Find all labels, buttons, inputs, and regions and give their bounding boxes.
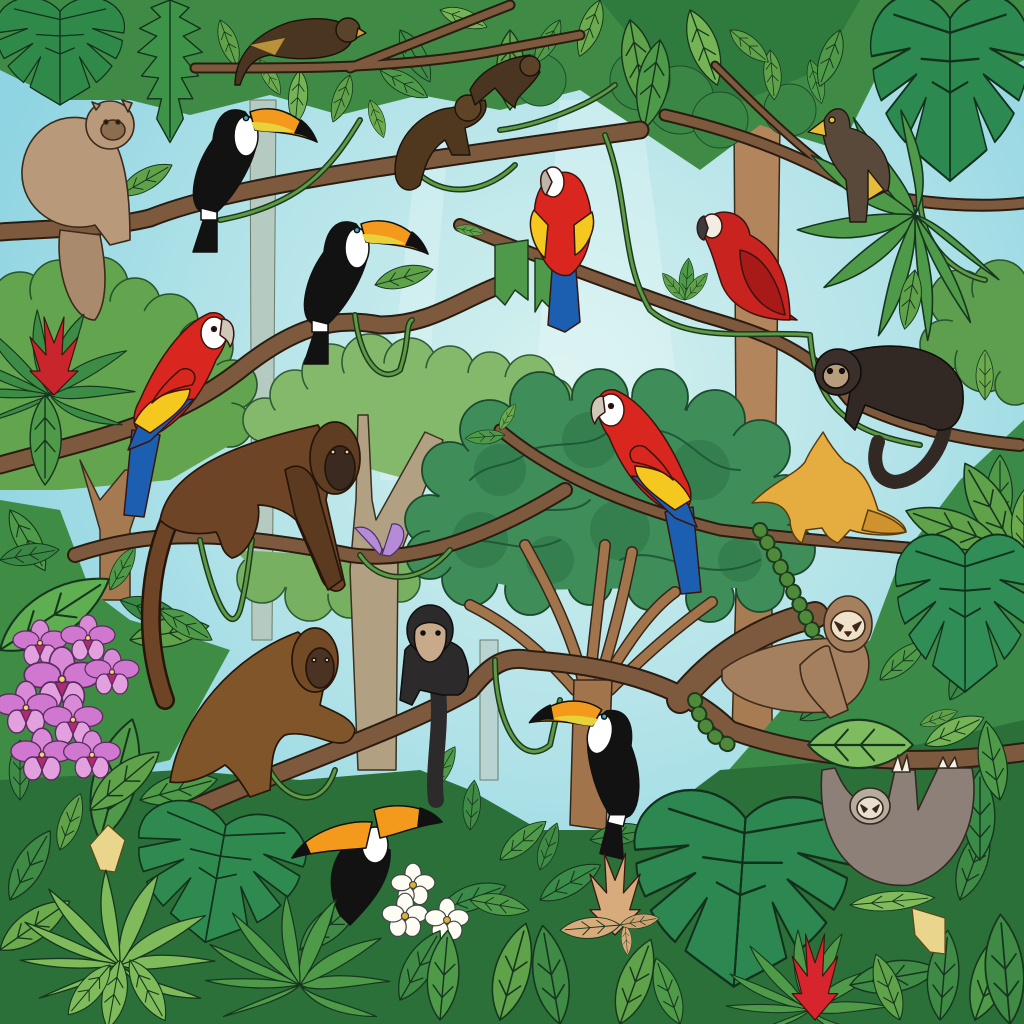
red bromeliad: bottom — [792, 934, 838, 1020]
toucan: lower center with twin beaks — [292, 806, 442, 925]
yellow flower right — [912, 908, 945, 954]
orchid cluster — [0, 615, 139, 780]
macaw: upright on vine branch — [530, 167, 594, 332]
bottom foreground foliage — [20, 870, 1024, 1024]
toucan: center right on low branch — [503, 690, 658, 859]
beaded vine on right branch — [695, 530, 848, 745]
monkey: black howler, right branch — [815, 346, 963, 482]
branches — [0, 5, 1024, 810]
monkey: brown lower left — [170, 628, 355, 797]
leaf on branch above grey sloth — [808, 720, 913, 768]
monkey: large brown — [151, 422, 360, 700]
animal: small dark monkey in upper canopy — [470, 55, 540, 108]
vine colour overlay — [200, 85, 985, 798]
right tree canopy — [920, 260, 1024, 405]
middle background trees — [80, 415, 443, 770]
animal: golden monkey on branch — [752, 432, 906, 543]
right foliage mass — [720, 420, 1024, 780]
yellow flower left — [90, 825, 125, 872]
lower foliage mass — [0, 720, 1024, 1024]
right foliage leaves — [896, 455, 1024, 692]
bromeliad: tan — [559, 853, 661, 955]
background trunks — [250, 100, 780, 780]
macaw: center right — [591, 390, 701, 594]
monkey: tan, top left — [22, 100, 134, 320]
middle light canopy — [243, 334, 573, 510]
toucan: upper left — [193, 109, 317, 252]
parrot: red, upper right — [697, 212, 797, 320]
red bromeliad: upper left — [0, 310, 135, 485]
dark central tree canopy — [405, 369, 815, 622]
animal: dark monkey on top branch — [235, 18, 366, 85]
toucan: second left — [304, 221, 428, 364]
macaw: left with wing — [124, 313, 234, 517]
left foliage mass — [0, 500, 230, 800]
white flowers — [382, 863, 469, 940]
lower foreground foliage behind animals — [0, 713, 1013, 994]
light rays — [380, 100, 700, 560]
top canopy foliage — [0, 0, 1024, 181]
branch outlines — [0, 5, 1024, 810]
small leaves beside grey sloth — [918, 705, 988, 755]
bird: brown, top right — [808, 109, 890, 222]
moss on branch — [495, 240, 558, 312]
sloth: grey, hanging below branch — [821, 755, 974, 885]
small branch leaves — [115, 95, 1010, 446]
butterfly: purple — [355, 524, 404, 556]
left tree canopy — [0, 257, 257, 490]
lower light canopy — [235, 550, 420, 621]
branch fills — [0, 5, 1024, 810]
large left leaf — [0, 560, 121, 668]
central tree trunk and limbs — [470, 545, 712, 830]
sloth: tan, hanging on right branch — [722, 596, 872, 718]
monkey: black capuchin — [400, 605, 468, 800]
animal: small dark monkey on second branch — [395, 95, 486, 190]
hanging vines — [200, 85, 985, 798]
